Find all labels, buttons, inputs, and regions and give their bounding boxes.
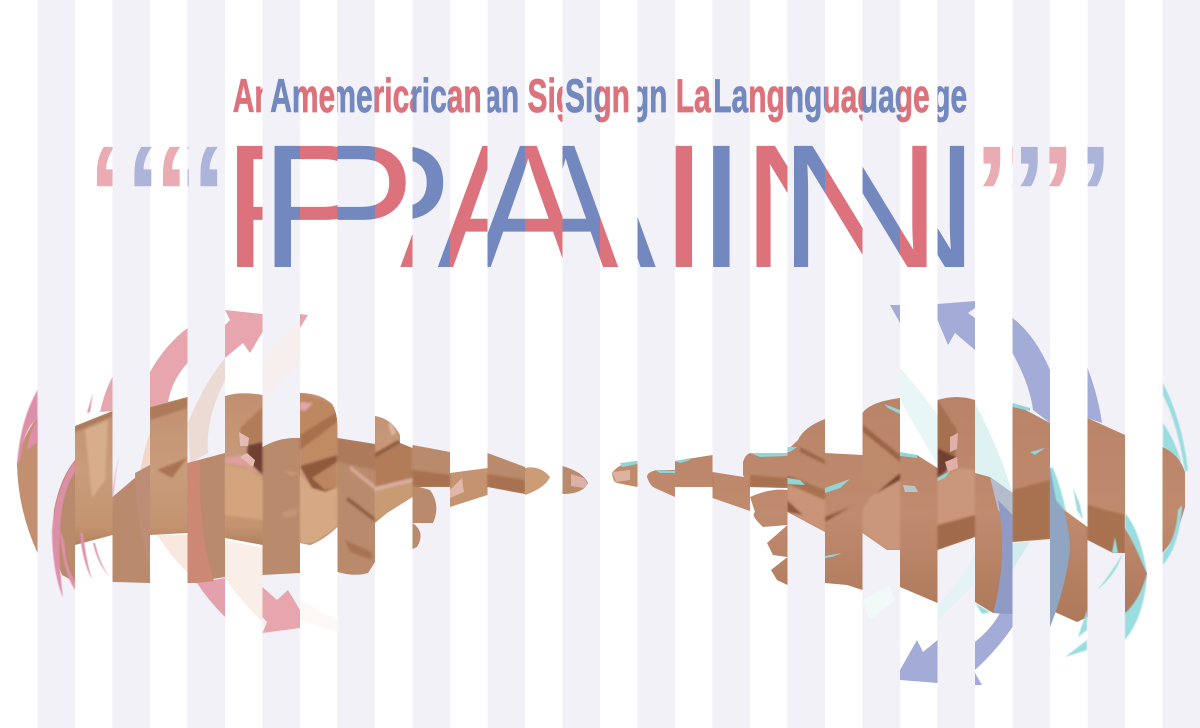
opening quotation marks: “: [128, 110, 187, 306]
closing quotation marks: ”: [1014, 110, 1073, 306]
pink arc overlays on the hand: [135, 460, 214, 583]
PAIN slices in pink: P: [298, 109, 415, 305]
PAIN slices in blue: P: [260, 109, 377, 305]
closing quotation marks: [976, 110, 1110, 306]
closing quotation marks: ”: [1014, 110, 1073, 306]
opening quotation marks: [90, 110, 224, 306]
opening quotation marks: “: [90, 110, 149, 306]
opening quotation marks: “: [166, 110, 224, 306]
PAIN slices in pink: [223, 109, 941, 305]
closing quotation marks: ”: [1052, 110, 1110, 306]
PAIN slices in blue: P: [335, 109, 452, 305]
icon: blue circular arrows and teal crescents: [862, 301, 1102, 685]
closing quotation marks: ”: [976, 110, 1035, 306]
subtitle: American Sign Language, interlaced: [233, 69, 967, 122]
PAIN slices in pink: P: [223, 109, 340, 305]
blue arc overlays, nails and teal highlights: [612, 403, 1070, 627]
left hand in light slices: [17, 393, 550, 553]
title: "PAIN", interlaced: [90, 109, 1110, 306]
right hand shading and folds: [675, 400, 1125, 553]
left hand nails: [239, 432, 588, 498]
teal motion streaks: [975, 383, 1188, 657]
right hand slices: [612, 397, 1185, 622]
PAIN slices in blue: I: [697, 109, 746, 305]
left hand shading, folds and nails: [75, 393, 525, 560]
subtitle slices in pink: [233, 69, 930, 122]
PAIN slices in pink: I: [659, 109, 708, 305]
left hand in dark slices: [54, 438, 588, 583]
PAIN slices in pink: P: [260, 109, 377, 305]
PAIN slices in blue: [260, 109, 978, 305]
opening quotation marks: “: [128, 110, 187, 306]
illustration: left hand with pink rotation arrows: [17, 310, 588, 633]
pink motion streaks: [17, 390, 120, 598]
icon: pink circular arrows and pale crescents: [100, 310, 337, 633]
illustration: right hand with blue rotation arrows: [612, 301, 1188, 685]
PAIN slices in blue: P: [298, 109, 415, 305]
subtitle slices in blue: [270, 69, 967, 122]
